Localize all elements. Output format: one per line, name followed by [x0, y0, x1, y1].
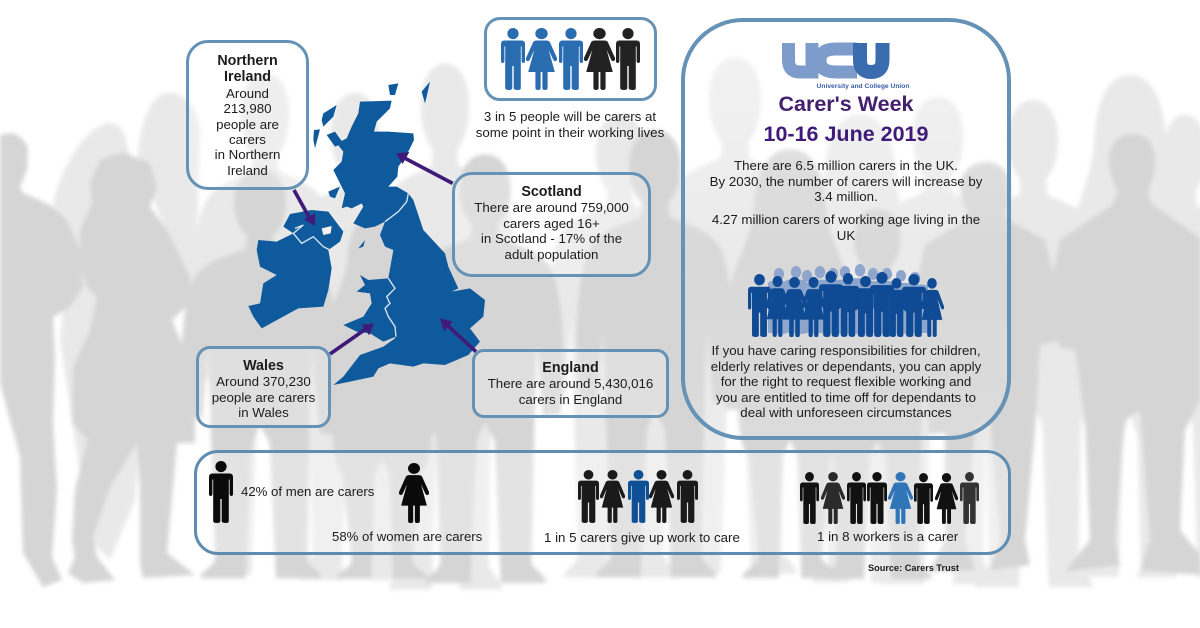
left man	[0, 134, 83, 587]
icons: 1 in 8 workers	[800, 472, 979, 524]
arrow: Northern Ireland	[294, 190, 315, 226]
text: England: England	[542, 360, 599, 376]
panel: Northern Ireland	[186, 40, 309, 190]
arrow: Scotland	[396, 152, 453, 183]
text: 3 in 5 caption	[476, 109, 664, 140]
text: Scotland: carers aged 16+	[503, 216, 600, 231]
map: Ireland	[248, 210, 343, 328]
panel: bottom statistics	[194, 450, 1011, 555]
text: caring responsibilities: elderly relatives or dependants, you can apply	[711, 358, 981, 374]
heading: Carer's Week: Carer's Week	[778, 92, 914, 116]
text: working age: 4.27 million carers of working age living in the	[712, 212, 980, 227]
text: Northern Ireland: carers	[229, 132, 266, 147]
text: carer statistics: 3.4 million.	[814, 189, 878, 204]
big right man	[1048, 134, 1200, 575]
source: Source: Carers Trust	[868, 563, 959, 573]
text: carer statistics: There are 6.5 million carers in the UK.	[734, 158, 958, 173]
text: Wales: in Wales	[238, 405, 289, 420]
icons: 1 in 5 carers	[578, 470, 698, 523]
panel: Wales	[196, 346, 331, 428]
text: carer statistics: By 2030, the number of carers will increase by	[710, 174, 982, 189]
text: Wales: people are carers	[212, 390, 315, 405]
text: caring responsibilities: deal with unforeseen circumstances	[740, 405, 952, 420]
text: Scotland: There are around 759,000	[474, 200, 629, 215]
map: England and Wales	[333, 193, 485, 385]
text: 3 in 5 caption: some point in their working lives	[476, 125, 664, 140]
text: Northern Ireland: in Northern	[215, 147, 280, 162]
text: Northern Ireland: Northern	[217, 53, 278, 69]
logo: UCU: University and College Union	[817, 83, 909, 90]
text: Northern Ireland: people are	[216, 117, 279, 132]
arrow: Wales	[330, 323, 374, 354]
heading: dates: 10-16 June 2019	[764, 122, 928, 146]
text: 1 in 8 workers: 1 in 8 workers is a carer	[817, 529, 958, 544]
left woman	[68, 152, 195, 583]
text: working age	[712, 212, 980, 243]
text: caring responsibilities: If you have caring responsibilities for children,	[711, 343, 981, 358]
right figure	[915, 162, 1062, 572]
text: England: carers in England	[519, 392, 622, 407]
icon: man	[209, 461, 233, 523]
text: carer statistics	[710, 158, 982, 204]
panel: England	[472, 349, 669, 418]
text: Wales: Around 370,230	[216, 374, 311, 389]
panel: Carer's Week	[681, 18, 1011, 440]
text: Scotland: adult population	[505, 247, 598, 262]
text: Northern Ireland: Ireland	[224, 69, 271, 85]
panel: Scotland	[452, 172, 651, 277]
text: Northern Ireland: Around	[226, 86, 269, 101]
text: Scotland: Scotland	[521, 184, 582, 200]
panel: 3 in 5 pictogram	[484, 17, 657, 101]
text: 58% of women: 58% of women are carers	[332, 529, 482, 544]
text: Scotland	[474, 184, 629, 262]
text: 42% of men: 42% of men are carers	[241, 484, 374, 499]
text: Northern Ireland: 213,980	[223, 101, 272, 116]
text: Wales	[212, 358, 315, 420]
text: caring responsibilities: you are entitled to time off for dependants to	[716, 390, 976, 404]
text: Northern Ireland	[215, 53, 280, 178]
text: working age: UK	[837, 228, 855, 243]
text: caring responsibilities	[711, 343, 982, 420]
text: England: There are around 5,430,016	[488, 376, 653, 391]
text: England	[488, 360, 653, 407]
map: Scotland and islands	[313, 82, 430, 228]
text: 3 in 5 caption: 3 in 5 people will be carers at	[484, 109, 656, 124]
text: caring responsibilities: for the right to request flexible working and	[721, 374, 971, 389]
text: 1 in 5 carers: 1 in 5 carers give up work to care	[544, 530, 740, 545]
text: Scotland: in Scotland - 17% of the	[481, 231, 622, 246]
text: Northern Ireland: Ireland	[227, 163, 268, 178]
text: Wales: Wales	[243, 358, 284, 374]
icon: woman	[399, 463, 429, 523]
arrow: England	[440, 318, 476, 352]
